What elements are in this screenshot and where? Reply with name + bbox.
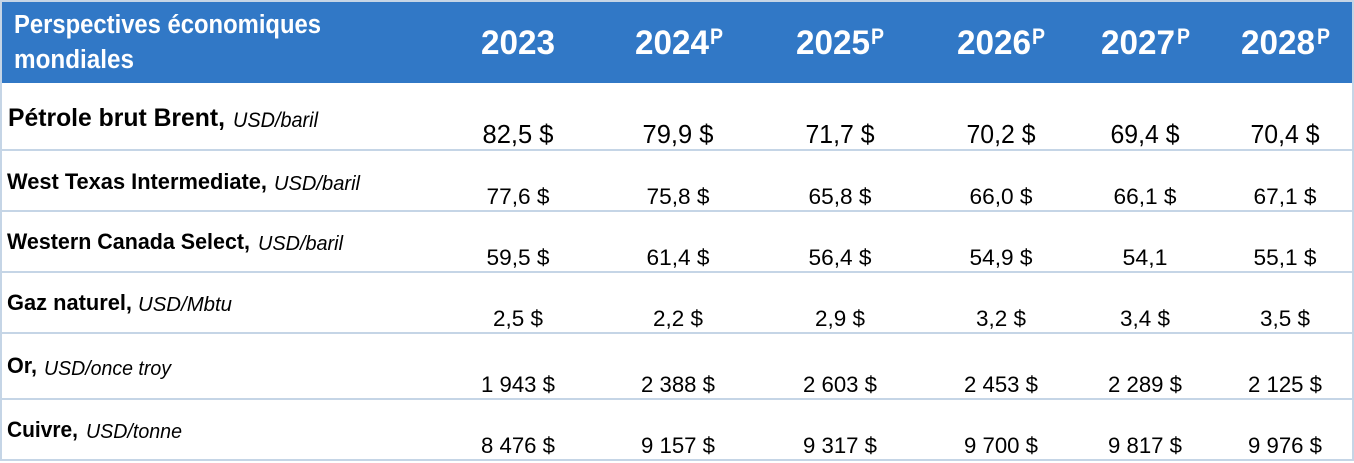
row: Brent crude: 70,4 $ <box>1250 119 1320 149</box>
row: West Texas Intermediate: 66,0 $ <box>970 184 1033 209</box>
row: West Texas Intermediate: 67,1 $ <box>1254 184 1317 209</box>
year headings: P <box>871 24 884 49</box>
row: Western Canada Select: 61,4 $ <box>646 245 710 270</box>
heading: title: mondiales <box>14 46 134 74</box>
year headings: 2026 <box>957 24 1031 62</box>
row: copper: 9 700 $ <box>964 433 1038 458</box>
heading: title: Perspectives économiques <box>14 11 321 39</box>
row: Western Canada Select: 55,1 $ <box>1254 245 1317 270</box>
row: gold: 2 289 $ <box>1108 372 1182 397</box>
row: Brent crude: 79,9 $ <box>642 119 714 149</box>
row: Brent crude <box>8 104 1320 149</box>
row: copper: 9 976 $ <box>1248 433 1322 458</box>
row: natural gas: 3,5 $ <box>1260 306 1310 331</box>
year headings: P <box>710 24 723 49</box>
row: Brent crude: 69,4 $ <box>1110 119 1180 149</box>
year headings: 2023 <box>481 24 555 62</box>
row: Brent crude: 71,7 $ <box>806 119 875 149</box>
row: Brent crude: 82,5 $ <box>482 119 554 149</box>
row: Western Canada Select: 54,9 $ <box>970 245 1033 270</box>
row: copper: Cuivre, <box>7 417 78 442</box>
row: gold: USD/once troy <box>44 358 172 380</box>
row: West Texas Intermediate: USD/baril <box>274 173 361 195</box>
header band <box>2 2 1352 83</box>
row: natural gas <box>7 290 1310 331</box>
row: West Texas Intermediate <box>7 169 1317 209</box>
row: gold: 2 388 $ <box>641 372 715 397</box>
row: natural gas: 2,2 $ <box>653 306 703 331</box>
row: gold: Or, <box>7 353 37 378</box>
row: gold: 1 943 $ <box>481 372 555 397</box>
row: Brent crude: Pétrole brut Brent, <box>8 104 225 132</box>
row: gold: 2 125 $ <box>1248 372 1322 397</box>
row: gold: 2 453 $ <box>964 372 1038 397</box>
row: gold: 2 603 $ <box>803 372 877 397</box>
year headings: 2028 <box>1241 24 1315 62</box>
row: West Texas Intermediate: 77,6 $ <box>486 184 550 209</box>
row: West Texas Intermediate: 66,1 $ <box>1114 184 1177 209</box>
heading: title <box>14 11 321 74</box>
row: copper: 9 817 $ <box>1108 433 1182 458</box>
row: West Texas Intermediate: West Texas Intermediate, <box>7 169 267 194</box>
row: Western Canada Select: 56,4 $ <box>808 245 872 270</box>
row: gold <box>7 353 1322 397</box>
row: Brent crude: 70,2 $ <box>966 119 1036 149</box>
row: natural gas: 3,2 $ <box>976 306 1026 331</box>
row: copper: 9 157 $ <box>641 433 715 458</box>
year headings <box>481 24 1330 62</box>
row: West Texas Intermediate: 65,8 $ <box>808 184 872 209</box>
row: natural gas: USD/Mbtu <box>138 294 232 316</box>
row: copper: 9 317 $ <box>803 433 877 458</box>
row: copper: USD/tonne <box>86 421 182 443</box>
row: Western Canada Select <box>7 229 1317 270</box>
row: natural gas: 2,9 $ <box>815 306 865 331</box>
row: West Texas Intermediate: 75,8 $ <box>646 184 710 209</box>
row: Western Canada Select: USD/baril <box>258 233 344 255</box>
row: natural gas: 3,4 $ <box>1120 306 1170 331</box>
row: Western Canada Select: 54,1 <box>1122 245 1168 270</box>
row: natural gas: Gaz naturel, <box>7 290 132 315</box>
row: Western Canada Select: Western Canada Select, <box>7 229 250 254</box>
year headings: P <box>1032 24 1045 49</box>
row: natural gas: 2,5 $ <box>493 306 543 331</box>
year headings: 2025 <box>796 24 870 62</box>
row: Brent crude: USD/baril <box>233 109 319 132</box>
year headings: P <box>1317 24 1330 49</box>
row: copper: 8 476 $ <box>481 433 555 458</box>
year headings: 2024 <box>635 24 709 62</box>
year headings: P <box>1177 24 1190 49</box>
row: copper <box>7 417 1322 458</box>
year headings: 2027 <box>1101 24 1175 62</box>
row: Western Canada Select: 59,5 $ <box>486 245 550 270</box>
